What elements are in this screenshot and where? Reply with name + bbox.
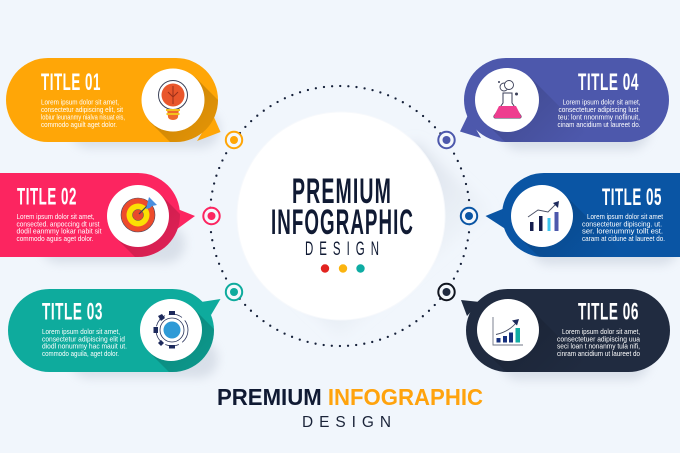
body text: diodl nonummy hac mauit ut. bbox=[42, 342, 127, 351]
node: indigo bbox=[438, 132, 455, 148]
body text: teu: lont nnonmmy nofiinuit, bbox=[558, 112, 640, 121]
body text: Lorem ipsum dolor sit amet, bbox=[42, 327, 120, 336]
body text: caram at cidune at laureet do. bbox=[582, 234, 665, 243]
body text: commodo aguilt aget dolor. bbox=[41, 120, 117, 129]
body text: Lorem ipsum dolor sit amet, bbox=[562, 98, 640, 106]
dotted ring bbox=[210, 86, 470, 346]
bottom subtitle: DESIGN bbox=[302, 414, 397, 431]
node: pink bbox=[203, 208, 220, 224]
body text: dodil eanmmy lokar nabit sit bbox=[16, 227, 102, 236]
heading: TITLE 03 bbox=[42, 298, 103, 326]
card: title 01 bbox=[6, 58, 222, 150]
node: navy bbox=[438, 284, 455, 300]
central long shadow bbox=[280, 142, 490, 337]
body text bbox=[42, 327, 127, 358]
icon: flask bbox=[475, 68, 539, 132]
body text: Lorem ipsum dolor sit amet, bbox=[16, 212, 94, 221]
node: blue bbox=[461, 208, 477, 224]
body text: commodo aguis aget dolor. bbox=[16, 234, 94, 243]
body text bbox=[16, 212, 102, 243]
body text bbox=[41, 98, 125, 129]
heading: TITLE 01 bbox=[41, 69, 101, 96]
body text: Lorem ipsum dolor sit amet bbox=[587, 212, 663, 221]
node: orange bbox=[226, 132, 242, 148]
body text: consectetuer adipiscing lust bbox=[558, 105, 638, 114]
central title line 1: PREMIUM bbox=[292, 172, 392, 211]
bottom title: PREMIUM INFOGRAPHIC bbox=[217, 384, 483, 410]
body text: cinram ancidium ut laureet do bbox=[557, 349, 640, 358]
body text: consectetuer adipiscing uua bbox=[557, 334, 641, 343]
body text bbox=[557, 327, 641, 358]
heading: TITLE 02 bbox=[17, 184, 77, 210]
body text: Lorem ipsum dolor sit amet, bbox=[41, 98, 119, 106]
body text: Lorem ipsum dolor sit amet, bbox=[562, 327, 640, 336]
central circle bbox=[237, 112, 445, 320]
card: title 04 bbox=[460, 58, 669, 152]
card: title 03 bbox=[8, 289, 220, 380]
icon: gear bbox=[140, 299, 202, 361]
icon: light bulb bbox=[142, 68, 204, 132]
central title line 2: INFOGRAPHIC bbox=[271, 203, 414, 242]
body text: lobiur leunanmy nialva nisuat eis, bbox=[41, 112, 125, 121]
card: title 02 bbox=[0, 173, 195, 265]
three coloured dots bbox=[321, 264, 365, 273]
card: title 06 bbox=[461, 289, 670, 382]
icon: target with dart bbox=[107, 185, 169, 247]
central subtitle: DESIGN bbox=[305, 239, 385, 260]
node: teal bbox=[226, 284, 242, 300]
body text bbox=[558, 98, 640, 129]
card: title 05 bbox=[486, 173, 680, 267]
body text: ser. lorenummy tollt est. bbox=[582, 227, 663, 236]
body text: consectetur adipiscing elit id bbox=[42, 334, 125, 343]
icon: bar chart with arrow bbox=[511, 185, 573, 247]
body text: consected. anpoccing dt urst bbox=[16, 219, 100, 228]
body text: seci loan t nonanmy tula nifi, bbox=[557, 342, 640, 351]
body text bbox=[582, 212, 665, 243]
body text: cinam ancidium ut laureet do. bbox=[558, 120, 640, 129]
body text: commodo aguila, aget dolor. bbox=[42, 349, 119, 358]
body text: consectetur adipiscing elit, sit bbox=[41, 105, 123, 114]
icon: growth chart bbox=[477, 299, 539, 361]
body text: consectetuer dipiscing. ut. bbox=[582, 219, 662, 228]
